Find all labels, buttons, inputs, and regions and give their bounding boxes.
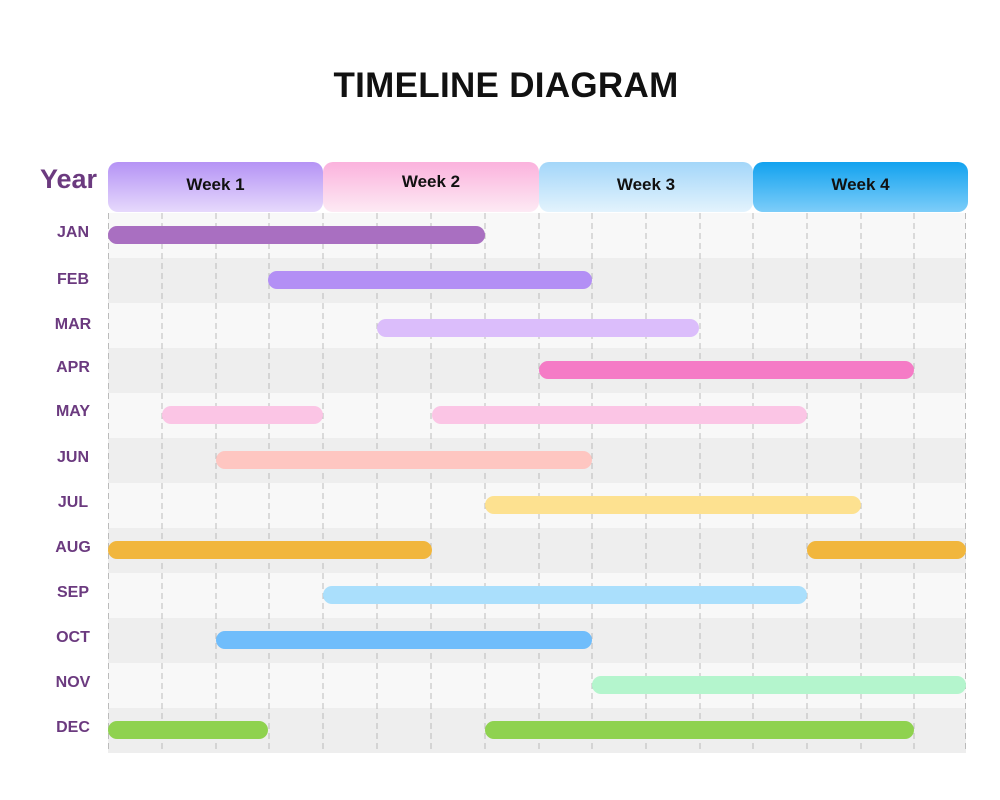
header: week 1: [108, 162, 323, 212]
month labels: OCT: [56, 629, 90, 646]
header: week 2: Week 2: [402, 172, 460, 191]
header: week 4: [753, 162, 968, 212]
month labels: SEP: [57, 584, 89, 601]
header: week 2: [323, 162, 539, 212]
month labels: JAN: [57, 224, 89, 241]
month labels: MAY: [56, 403, 90, 420]
month labels: JUN: [57, 449, 89, 466]
month labels: AUG: [55, 539, 91, 556]
header: week 3: Week 3: [617, 175, 675, 194]
grid background: [108, 213, 966, 753]
year label: Year: [40, 164, 97, 194]
title: TIMELINE DIAGRAM: [333, 66, 679, 105]
header: week 1: Week 1: [186, 175, 245, 194]
header: week 3: [539, 162, 753, 212]
month labels: MAR: [55, 316, 91, 333]
header: week 4: Week 4: [831, 175, 890, 194]
month labels: JUL: [58, 494, 88, 511]
month labels: NOV: [56, 674, 90, 691]
month labels: APR: [56, 359, 90, 376]
month labels: FEB: [57, 271, 89, 288]
month labels: [55, 224, 91, 736]
month labels: DEC: [56, 719, 90, 736]
